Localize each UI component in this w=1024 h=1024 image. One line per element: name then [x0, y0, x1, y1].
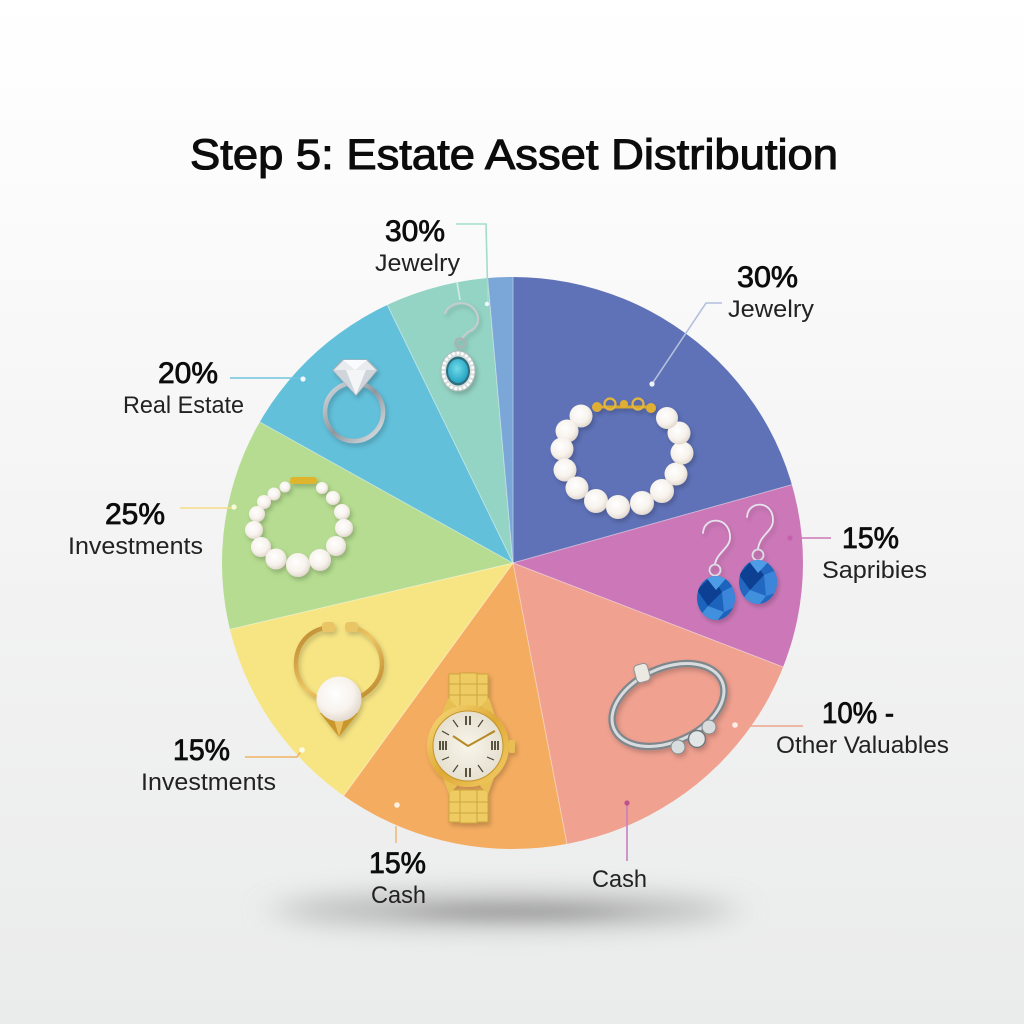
pie chart: [222, 277, 803, 849]
label: 20% Real Estate: Real Estate: [123, 392, 244, 419]
label: 10% Other Valuables: [776, 697, 949, 759]
icon: gold wristwatch: [427, 673, 515, 823]
wedge: orange: [344, 562, 568, 849]
icon: pearl bracelet with gold clasp: [550, 398, 694, 519]
label: 15% Cash: [369, 847, 426, 909]
label: 15% Investments: 15%: [173, 734, 230, 767]
leader: Real Estate: [230, 376, 306, 382]
icon: teal pendant earring: [441, 303, 478, 391]
label: 15% Cash: Cash: [371, 882, 426, 909]
leader: top Jewelry: [456, 224, 489, 306]
leader: right Jewelry: [649, 303, 722, 387]
watch band bottom: [449, 790, 488, 823]
leader: 15% Sapribies: [787, 535, 831, 541]
label: 15% Sapribies: Sapribies: [822, 557, 927, 584]
leader: 15% Investments: [245, 747, 305, 757]
icon: pearl ring: [296, 622, 382, 737]
title: Step 5: Estate Asset Distribution: [190, 131, 838, 179]
label: 20% Real Estate: [123, 357, 244, 419]
wedge: teal: [387, 278, 514, 562]
label: 15% Sapribies: 15%: [842, 522, 899, 555]
label: 15% Investments: Investments: [141, 769, 276, 796]
icon: blue drop earrings: [697, 505, 778, 622]
label: 30% Jewelry right: [728, 261, 814, 323]
label: 30% Jewelry right: 30%: [737, 261, 798, 294]
label: 10% Other Valuables: 10% -: [822, 697, 894, 730]
label: 25% Investments: Investments: [68, 533, 203, 560]
label: Cash: Cash: [592, 866, 647, 893]
icon: silver bangle: [599, 647, 737, 763]
icon: diamond ring: [325, 360, 383, 441]
label: 15% Sapribies: [822, 522, 927, 584]
label: 15% Investments: [141, 734, 276, 796]
leader: 10% Other Valuables: [732, 722, 803, 728]
label: 30% Jewelry top: 30%: [385, 215, 445, 248]
icon: graduated pearl bracelet: [245, 477, 353, 577]
wedge: light blue: [488, 277, 514, 563]
label: 20% Real Estate: 20%: [158, 357, 218, 390]
label: 30% Jewelry top: [375, 215, 460, 277]
wedge: green: [222, 422, 514, 630]
watch band top: [449, 673, 488, 707]
wedge: salmon: [513, 563, 783, 844]
wedge: purple: [514, 484, 803, 667]
wedge: cyan: [260, 305, 514, 564]
label: 25% Investments: [68, 498, 203, 560]
wedge: dark blue: [513, 277, 792, 563]
label: 15% Cash: 15%: [369, 847, 426, 880]
leader: Cash: [624, 800, 630, 861]
label: 30% Jewelry right: Jewelry: [728, 296, 814, 323]
label: 25% Investments: 25%: [105, 498, 165, 531]
ground shadow under pie: [275, 893, 735, 927]
leader: 15% Cash: [394, 802, 400, 843]
wedge: yellow: [230, 562, 514, 796]
label: 10% Other Valuables: Other Valuables: [776, 732, 949, 759]
leader: 25% Investments: [180, 504, 237, 510]
label: 30% Jewelry top: Jewelry: [375, 250, 460, 277]
